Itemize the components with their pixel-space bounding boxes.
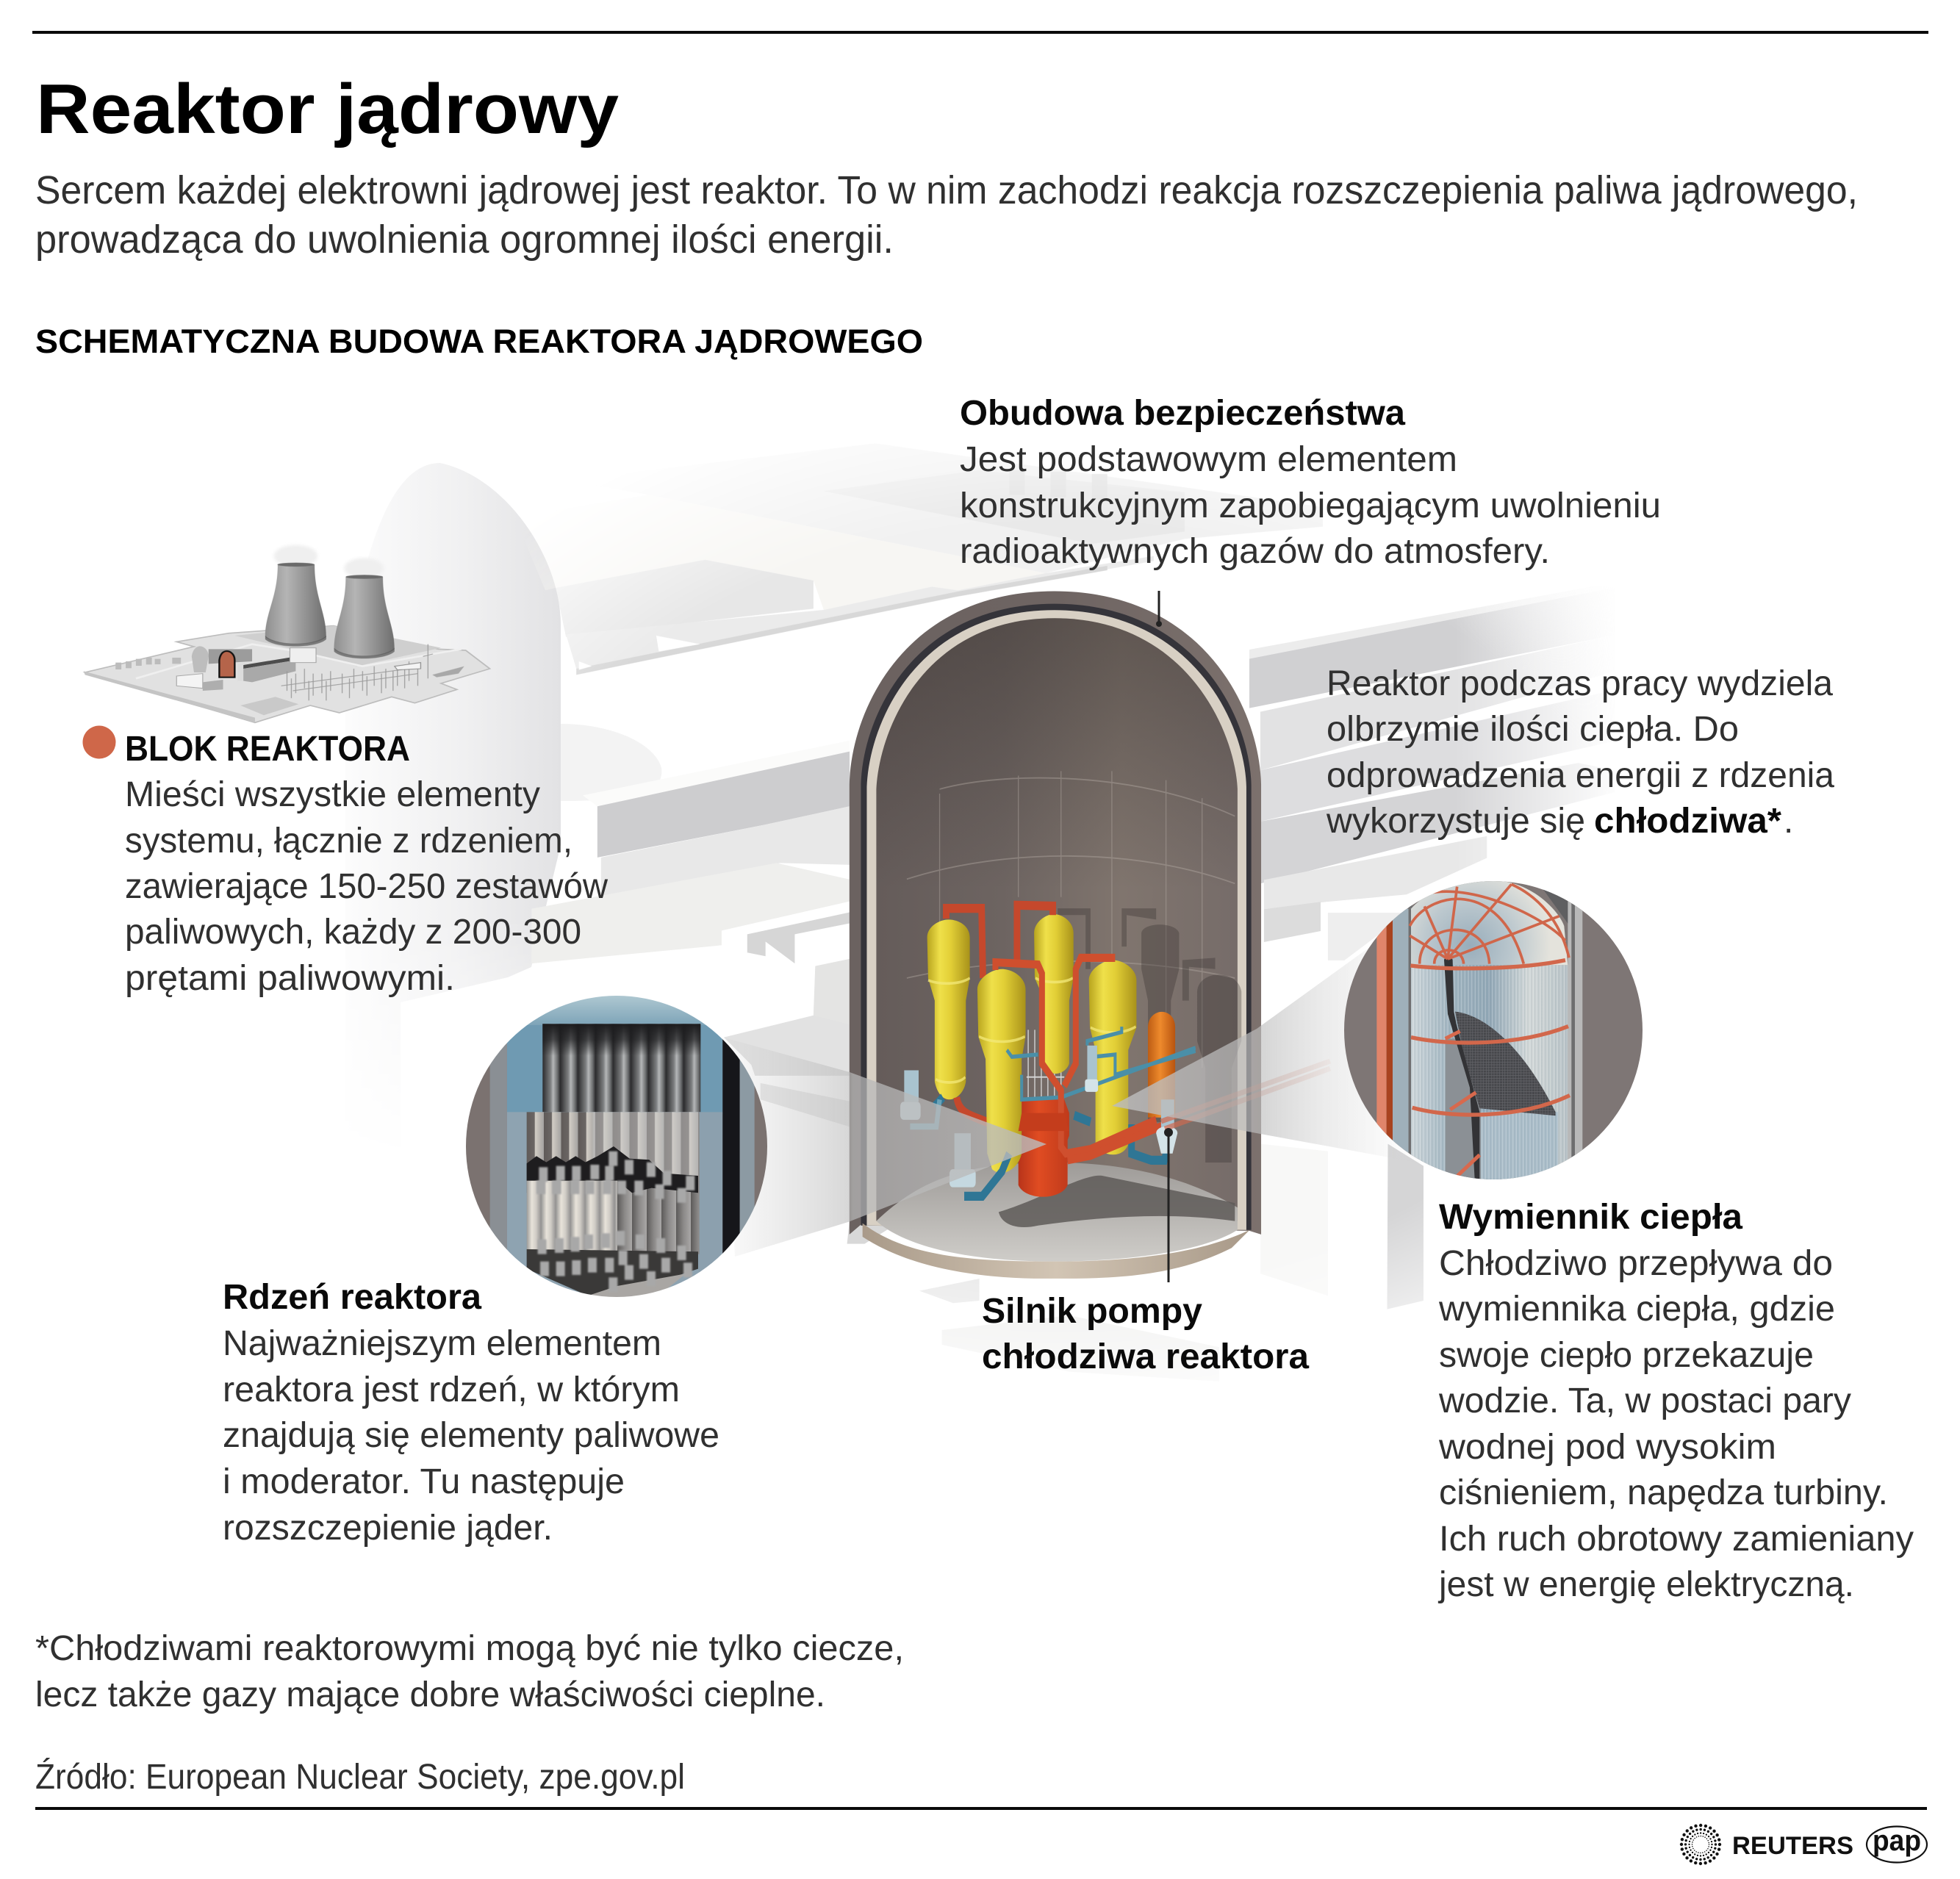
text block: rdzeń reaktora: rozszczepienie jąder. [223, 1509, 553, 1548]
text block: wymiennik ciepła: Chłodziwo przepływa do [1439, 1244, 1833, 1283]
bottom rule [35, 1807, 1927, 1810]
source: Źródło: European Nuclear Society, zpe.gov.pl [35, 1758, 685, 1797]
illustration: containment vessel [850, 591, 1261, 1279]
text block: rdzeń reaktora: reaktora jest rdzeń, w którym [223, 1370, 680, 1409]
footnote [35, 1629, 904, 1714]
text block: blok reaktora: Mieści wszystkie elementy [125, 775, 540, 814]
text block: rdzeń reaktora: Rdzeń reaktora [223, 1278, 481, 1317]
text block: rdzeń reaktora: Najważniejszym elementem [223, 1324, 661, 1363]
projection cone: core detail [724, 1038, 1047, 1257]
leader line: pump motor [1164, 1128, 1173, 1282]
text block: blok reaktora: zawierające 150-250 zestawów [125, 867, 608, 906]
background: ghosted dome [395, 463, 561, 994]
logo: PAP: pap [1873, 1825, 1921, 1857]
detail circle: reactor core [463, 992, 772, 1301]
text block: wymiennik ciepła: jest w energię elektryczną. [1437, 1565, 1854, 1604]
pressurizer [1148, 1012, 1175, 1118]
text block: obudowa bezpieczeństwa: konstrukcyjnym zapobiegającym uwolnieniu [960, 486, 1661, 525]
footnote: *Chłodziwami reaktorowymi mogą być nie tylko ciecze, [35, 1629, 904, 1668]
wall shadows [1058, 908, 1241, 1163]
logo: Reuters wordmark: REUTERS [1732, 1832, 1853, 1860]
highlighted reactor building icon [219, 651, 234, 678]
text block: obudowa bezpieczeństwa: Obudowa bezpieczeństwa [960, 394, 1405, 433]
text block: wymiennik ciepła: Wymiennik ciepła [1439, 1198, 1742, 1237]
text block: heat and coolant: chłodziwa* [1594, 802, 1781, 841]
projection cone: heat exchanger detail [1112, 925, 1421, 1163]
text block: heat and coolant [1326, 664, 1834, 841]
generator ribs [928, 978, 1136, 1082]
text block: heat and coolant: . [1784, 802, 1793, 841]
coolant pipes blue [1007, 1027, 1196, 1099]
text block: heat and coolant: odprowadzenia energii z rdzenia [1327, 756, 1834, 795]
text block: silnik pompy: chłodziwa reaktora [982, 1337, 1309, 1376]
text block: rdzeń reaktora: znajdują się elementy paliwowe [223, 1416, 719, 1455]
coolant pumps [900, 1046, 1177, 1188]
text block: heat and coolant: Reaktor podczas pracy wydziela [1327, 664, 1833, 703]
text block: blok reaktora: systemu, łącznie z rdzeniem, [125, 822, 572, 861]
background: ghosted reactor building [514, 443, 1615, 1382]
intro text: Sercem każdej elektrowni jądrowej jest reaktor. To w nim zachodzi reakcja rozszczepienia paliwa jądrowego, [35, 168, 1858, 212]
reactor flange [1019, 1113, 1069, 1131]
floor [876, 1163, 1238, 1262]
reactor pressure vessel [1019, 1099, 1069, 1197]
text block: heat and coolant: olbrzymie ilości ciepła. Do [1327, 710, 1739, 749]
text block: rdzeń reaktora [223, 1278, 719, 1548]
title: Reaktor jądrowy [36, 70, 619, 148]
illustration: power plant block [84, 545, 489, 722]
text block: wymiennik ciepła: Ich ruch obrotowy zamieniany [1439, 1520, 1914, 1559]
red pipes back [946, 905, 1053, 1124]
text block: wymiennik ciepła: swoje ciepło przekazuje [1439, 1336, 1814, 1375]
text block: wymiennik ciepła: wymiennika ciepła, gdzie [1438, 1290, 1835, 1329]
text block: heat and coolant: wykorzystuje się [1326, 802, 1585, 841]
wall grid lines [907, 771, 1235, 1068]
text block: blok reaktora: paliwowych, każdy z 200-300 [125, 913, 581, 952]
text block: obudowa bezpieczeństwa: Jest podstawowym elementem [960, 440, 1457, 479]
text block: wymiennik ciepła [1437, 1198, 1914, 1604]
top rule [32, 31, 1928, 34]
marker dot [82, 726, 116, 758]
text block: obudowa bezpieczeństwa [960, 394, 1661, 571]
text block: wymiennik ciepła: ciśnieniem, napędza turbiny. [1439, 1473, 1888, 1512]
hot leg pipes toward heat exchanger [1161, 1061, 1330, 1129]
footnote: lecz także gazy mające dobre właściwości cieplne. [35, 1675, 825, 1714]
text block: obudowa bezpieczeństwa: radioaktywnych gazów do atmosfery. [960, 532, 1550, 571]
text block: blok reaktora: BLOK REAKTORA [125, 730, 410, 769]
text block: blok reaktora [125, 730, 608, 998]
text block: blok reaktora: prętami paliwowymi. [125, 959, 455, 998]
intro text [35, 168, 1858, 262]
logo: Reuters sun [1681, 1825, 1720, 1864]
text block: silnik pompy: Silnik pompy [982, 1292, 1202, 1331]
red pipes front [995, 958, 1166, 1160]
text block: silnik pompy [982, 1292, 1309, 1376]
front steam generators [977, 960, 1136, 1173]
steam generators [927, 914, 1074, 1099]
leader line: containment [1156, 591, 1162, 627]
detail circle: heat exchanger [1343, 880, 1646, 1183]
intro text: prowadząca do uwolnienia ogromnej ilości energii. [35, 218, 894, 262]
internal glass core lines [1027, 1030, 1064, 1099]
text block: wymiennik ciepła: wodzie. Ta, w postaci pary [1438, 1382, 1851, 1420]
text block: rdzeń reaktora: i moderator. Tu następuje [223, 1462, 625, 1501]
section heading: SCHEMATYCZNA BUDOWA REAKTORA JĄDROWEGO [35, 323, 923, 360]
text block: wymiennik ciepła: wodnej pod wysokim [1438, 1428, 1776, 1467]
